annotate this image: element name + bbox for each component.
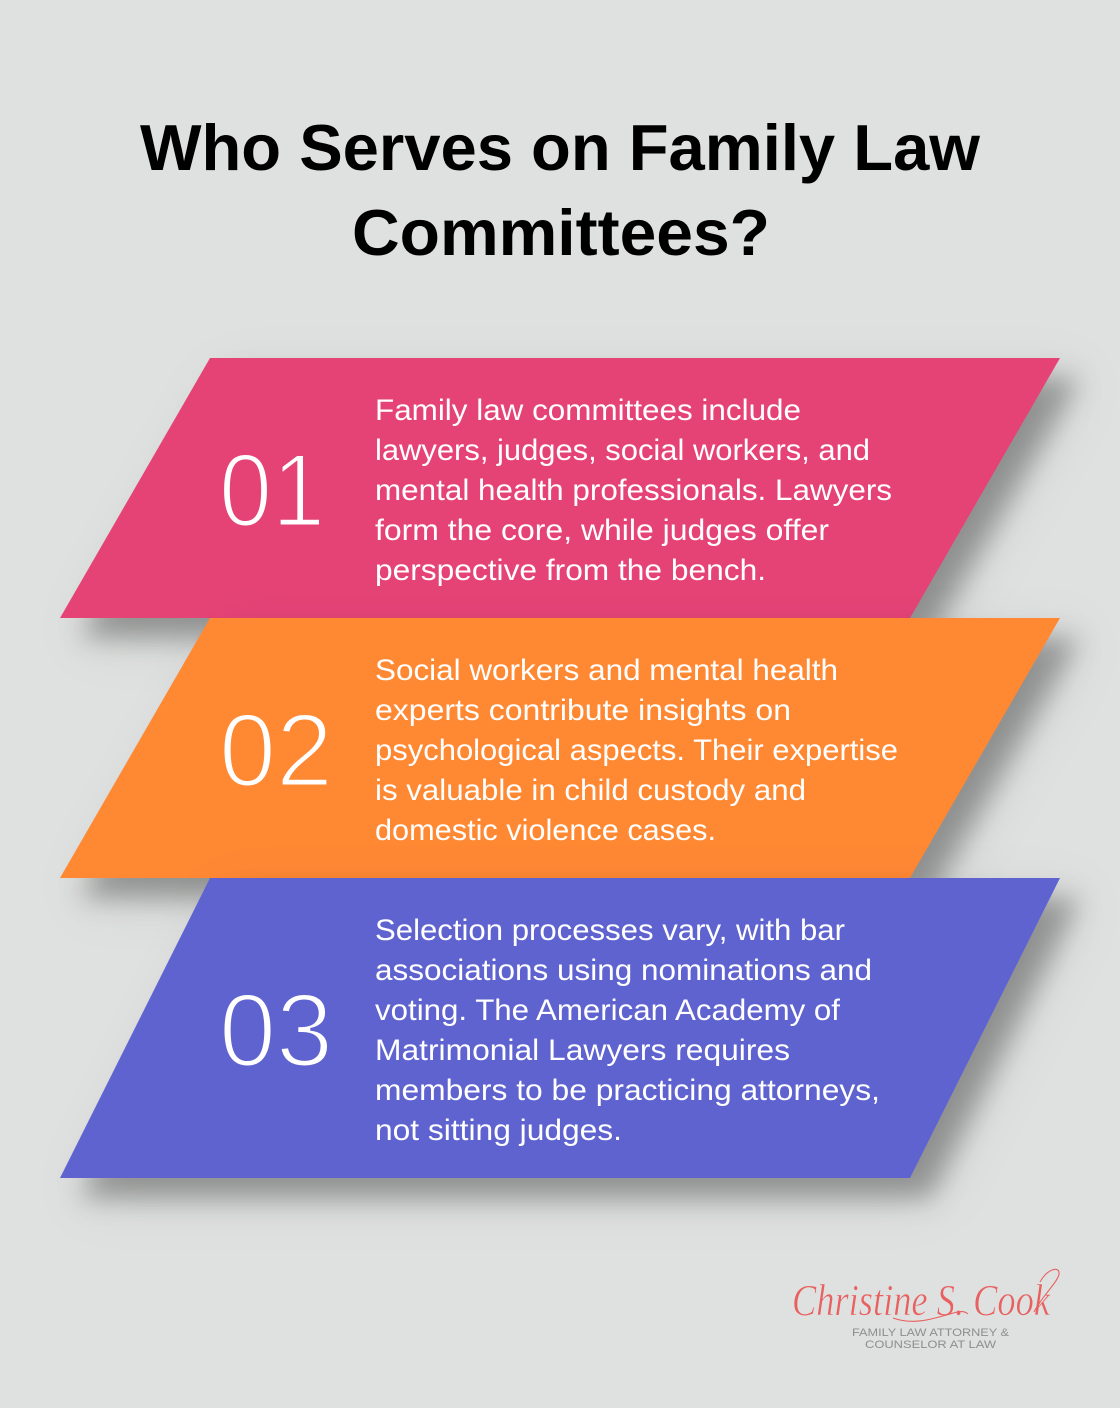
description 03: not sitting judges. (375, 1114, 622, 1147)
number 01: 01 (219, 433, 325, 549)
description 02: Social workers and mental health (375, 654, 838, 687)
description 03: members to be practicing attorneys, (375, 1074, 880, 1107)
number 02: 02 (219, 693, 333, 809)
logo: Christine S. Cook: COUNSELOR AT LAW (865, 1339, 997, 1351)
description 01: form the core, while judges offer (375, 514, 829, 547)
description 02: domestic violence cases. (375, 814, 716, 847)
description 03 (375, 914, 880, 1147)
blue parallelogram (60, 878, 1060, 1178)
title (140, 111, 980, 269)
logo: Christine S. Cook: FAMILY LAW ATTORNEY & (852, 1327, 1010, 1339)
pink parallelogram (60, 358, 1060, 618)
orange parallelogram (60, 618, 1060, 878)
logo: Christine S. Cook (792, 1269, 1059, 1351)
description 01 (375, 394, 892, 587)
description 01: perspective from the bench. (375, 554, 766, 587)
description 02 (375, 654, 898, 847)
description 03: voting. The American Academy of (375, 994, 841, 1027)
description 03: associations using nominations and (375, 954, 872, 987)
title: Committees? (352, 196, 770, 269)
logo: Christine S. Cook: Christine S. Cook (792, 1276, 1051, 1325)
title: Who Serves on Family Law (140, 111, 980, 184)
description 01: mental health professionals. Lawyers (375, 474, 892, 507)
description 02: is valuable in child custody and (375, 774, 806, 807)
description 01: Family law committees include (375, 394, 801, 427)
panel: step 02 (60, 618, 1080, 898)
description 01: lawyers, judges, social workers, and (375, 434, 870, 467)
number 03: 03 (219, 973, 333, 1089)
description 03: Selection processes vary, with bar (375, 914, 845, 947)
description 03: Matrimonial Lawyers requires (375, 1034, 790, 1067)
panel: step 01 (60, 358, 1080, 638)
panel: step 03 (60, 878, 1080, 1198)
description 02: psychological aspects. Their expertise (375, 734, 898, 767)
description 02: experts contribute insights on (375, 694, 791, 727)
